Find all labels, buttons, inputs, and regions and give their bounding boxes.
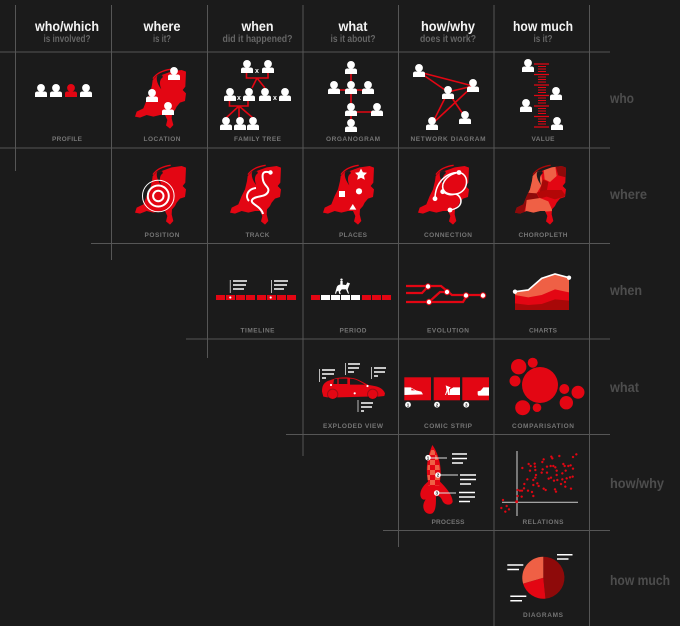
- heading: who/which: is involved?: [44, 34, 90, 45]
- pie chart: [522, 557, 564, 599]
- icon: rocket: [420, 445, 453, 514]
- heading: where: is it?: [153, 34, 171, 45]
- cell: comic strip: 3: [465, 402, 468, 407]
- cell: profile: PROFILE: [52, 136, 83, 143]
- cell: comparisation: COMPARISATION: [512, 423, 574, 430]
- cell: value: VALUE: [532, 136, 555, 143]
- cell: diagrams: DIAGRAMS: [523, 612, 564, 619]
- cell: family tree: x: [255, 68, 259, 75]
- heading: how much: [513, 18, 573, 45]
- cell: comparisation: [510, 358, 584, 430]
- cell: process: [420, 445, 476, 526]
- heading: how/why: does it work?: [420, 34, 476, 45]
- cell: process: 1: [427, 455, 430, 460]
- row labels: [609, 90, 670, 588]
- cell: period: PERIOD: [340, 328, 367, 334]
- cell: comic strip: 1: [407, 402, 410, 407]
- heading: when: [222, 18, 292, 45]
- cell: network diagram: [410, 64, 486, 143]
- cell: track: TRACK: [246, 232, 270, 239]
- heading: who/which: [34, 18, 99, 45]
- cell: process: 2: [437, 473, 440, 478]
- heading: where: where: [143, 18, 181, 34]
- cell: exploded view: [320, 363, 386, 430]
- cell: exploded view: EXPLODED VIEW: [323, 423, 384, 430]
- cell: timeline: TIMELINE: [240, 328, 275, 334]
- row label: where: where: [609, 186, 647, 202]
- cell: period: [311, 278, 391, 334]
- cell: organogram: [326, 61, 383, 143]
- heading: who/which: who/which: [34, 18, 99, 34]
- row label: how/why: how/why: [610, 475, 664, 491]
- cell: family tree: x: [273, 95, 277, 102]
- cell: connection: [418, 165, 472, 239]
- heading: how much: how much: [513, 18, 573, 34]
- area chart layers: [513, 274, 571, 310]
- cell: places: [323, 165, 374, 239]
- cell: organogram: ORGANOGRAM: [326, 136, 380, 143]
- choropleth regions: [515, 166, 566, 224]
- icon: red car: [322, 377, 385, 400]
- heading: how/why: [420, 18, 476, 45]
- cell: process: 3: [435, 491, 438, 496]
- cell: process: PROCESS: [432, 519, 465, 526]
- heading: what: [330, 18, 376, 45]
- cell: location: [135, 67, 186, 143]
- cell: choropleth: [515, 164, 566, 224]
- column headings: [34, 18, 573, 45]
- cell: charts: CHARTS: [529, 328, 558, 334]
- heading: when: did it happened?: [222, 34, 292, 45]
- cell: family tree: FAMILY TREE: [234, 136, 282, 143]
- cell: evolution: EVOLUTION: [427, 328, 469, 334]
- cell: diagrams: [507, 555, 572, 619]
- cell: network diagram: NETWORK DIAGRAM: [410, 136, 486, 143]
- heading: how much: is it?: [534, 34, 552, 45]
- heading: what: what: [338, 18, 368, 34]
- icon: horse and rider: [335, 278, 350, 294]
- heading: when: when: [241, 18, 274, 34]
- cell: relations: [500, 451, 578, 526]
- cell: location: LOCATION: [144, 136, 181, 143]
- cell: profile: [35, 84, 92, 143]
- cell: charts: [513, 274, 571, 334]
- row label: when: when: [609, 282, 642, 298]
- cell: track: [230, 165, 281, 239]
- cell: comic strip: [404, 377, 489, 430]
- heading: what: is it about?: [330, 34, 376, 45]
- heading: how/why: how/why: [421, 18, 475, 34]
- cell: family tree: x: [237, 95, 241, 102]
- cell: timeline: [216, 280, 296, 334]
- scatter points: [500, 453, 577, 513]
- cell: relations: RELATIONS: [522, 519, 564, 526]
- cell: position: [135, 165, 186, 239]
- row label: who: who: [609, 90, 634, 106]
- cell: position: POSITION: [144, 232, 180, 239]
- row label: how much: how much: [610, 572, 670, 588]
- row label: what: what: [609, 379, 639, 395]
- cell: evolution: [406, 284, 486, 334]
- cell: value: [520, 59, 563, 143]
- label: choropleth: CHOROPLETH: [518, 232, 568, 239]
- cell: family tree: [220, 60, 291, 143]
- heading: where: [143, 18, 181, 45]
- comic car silhouettes: [404, 385, 489, 396]
- cell: places: PLACES: [339, 232, 368, 239]
- cell: comic strip: COMIC STRIP: [424, 423, 473, 430]
- cell: comic strip: 2: [436, 402, 439, 407]
- cell: connection: CONNECTION: [424, 232, 472, 239]
